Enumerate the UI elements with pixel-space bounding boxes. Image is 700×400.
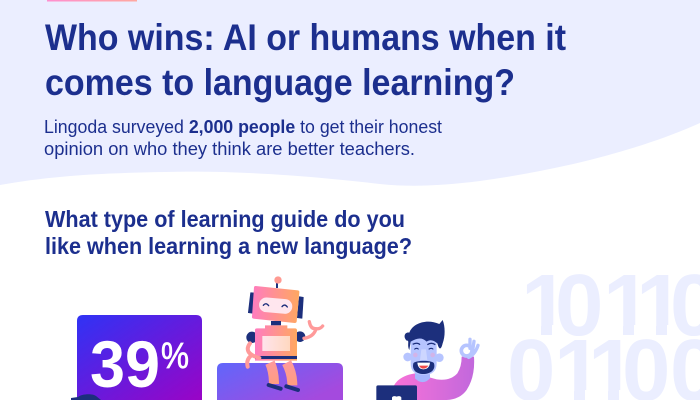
intro text [44, 117, 442, 159]
question heading: like when learning a new language? [45, 233, 412, 259]
intro text: opinion on who they think are better teachers. [44, 139, 415, 159]
title: comes to language learning? [45, 62, 515, 103]
card: 39 percent: % [161, 335, 189, 376]
binary digits background: 111 [521, 257, 684, 354]
title [45, 17, 566, 103]
card: second bar [217, 363, 343, 400]
binary digits background [507, 257, 700, 400]
title: Who wins: AI or humans when it [45, 17, 566, 58]
card: 39 percent [77, 315, 202, 400]
header background panel [0, 0, 700, 186]
question heading: What type of learning guide do you [45, 206, 405, 232]
icon: robot [246, 276, 323, 390]
icon: dark blob at bottom of card [71, 394, 101, 400]
intro text: Lingoda surveyed 2,000 people to get their honest [44, 117, 442, 137]
pink tag at top [47, 0, 137, 2]
card: 39 percent: 39 [90, 327, 160, 400]
question heading [45, 206, 412, 259]
icon: man with laptop [376, 320, 478, 400]
